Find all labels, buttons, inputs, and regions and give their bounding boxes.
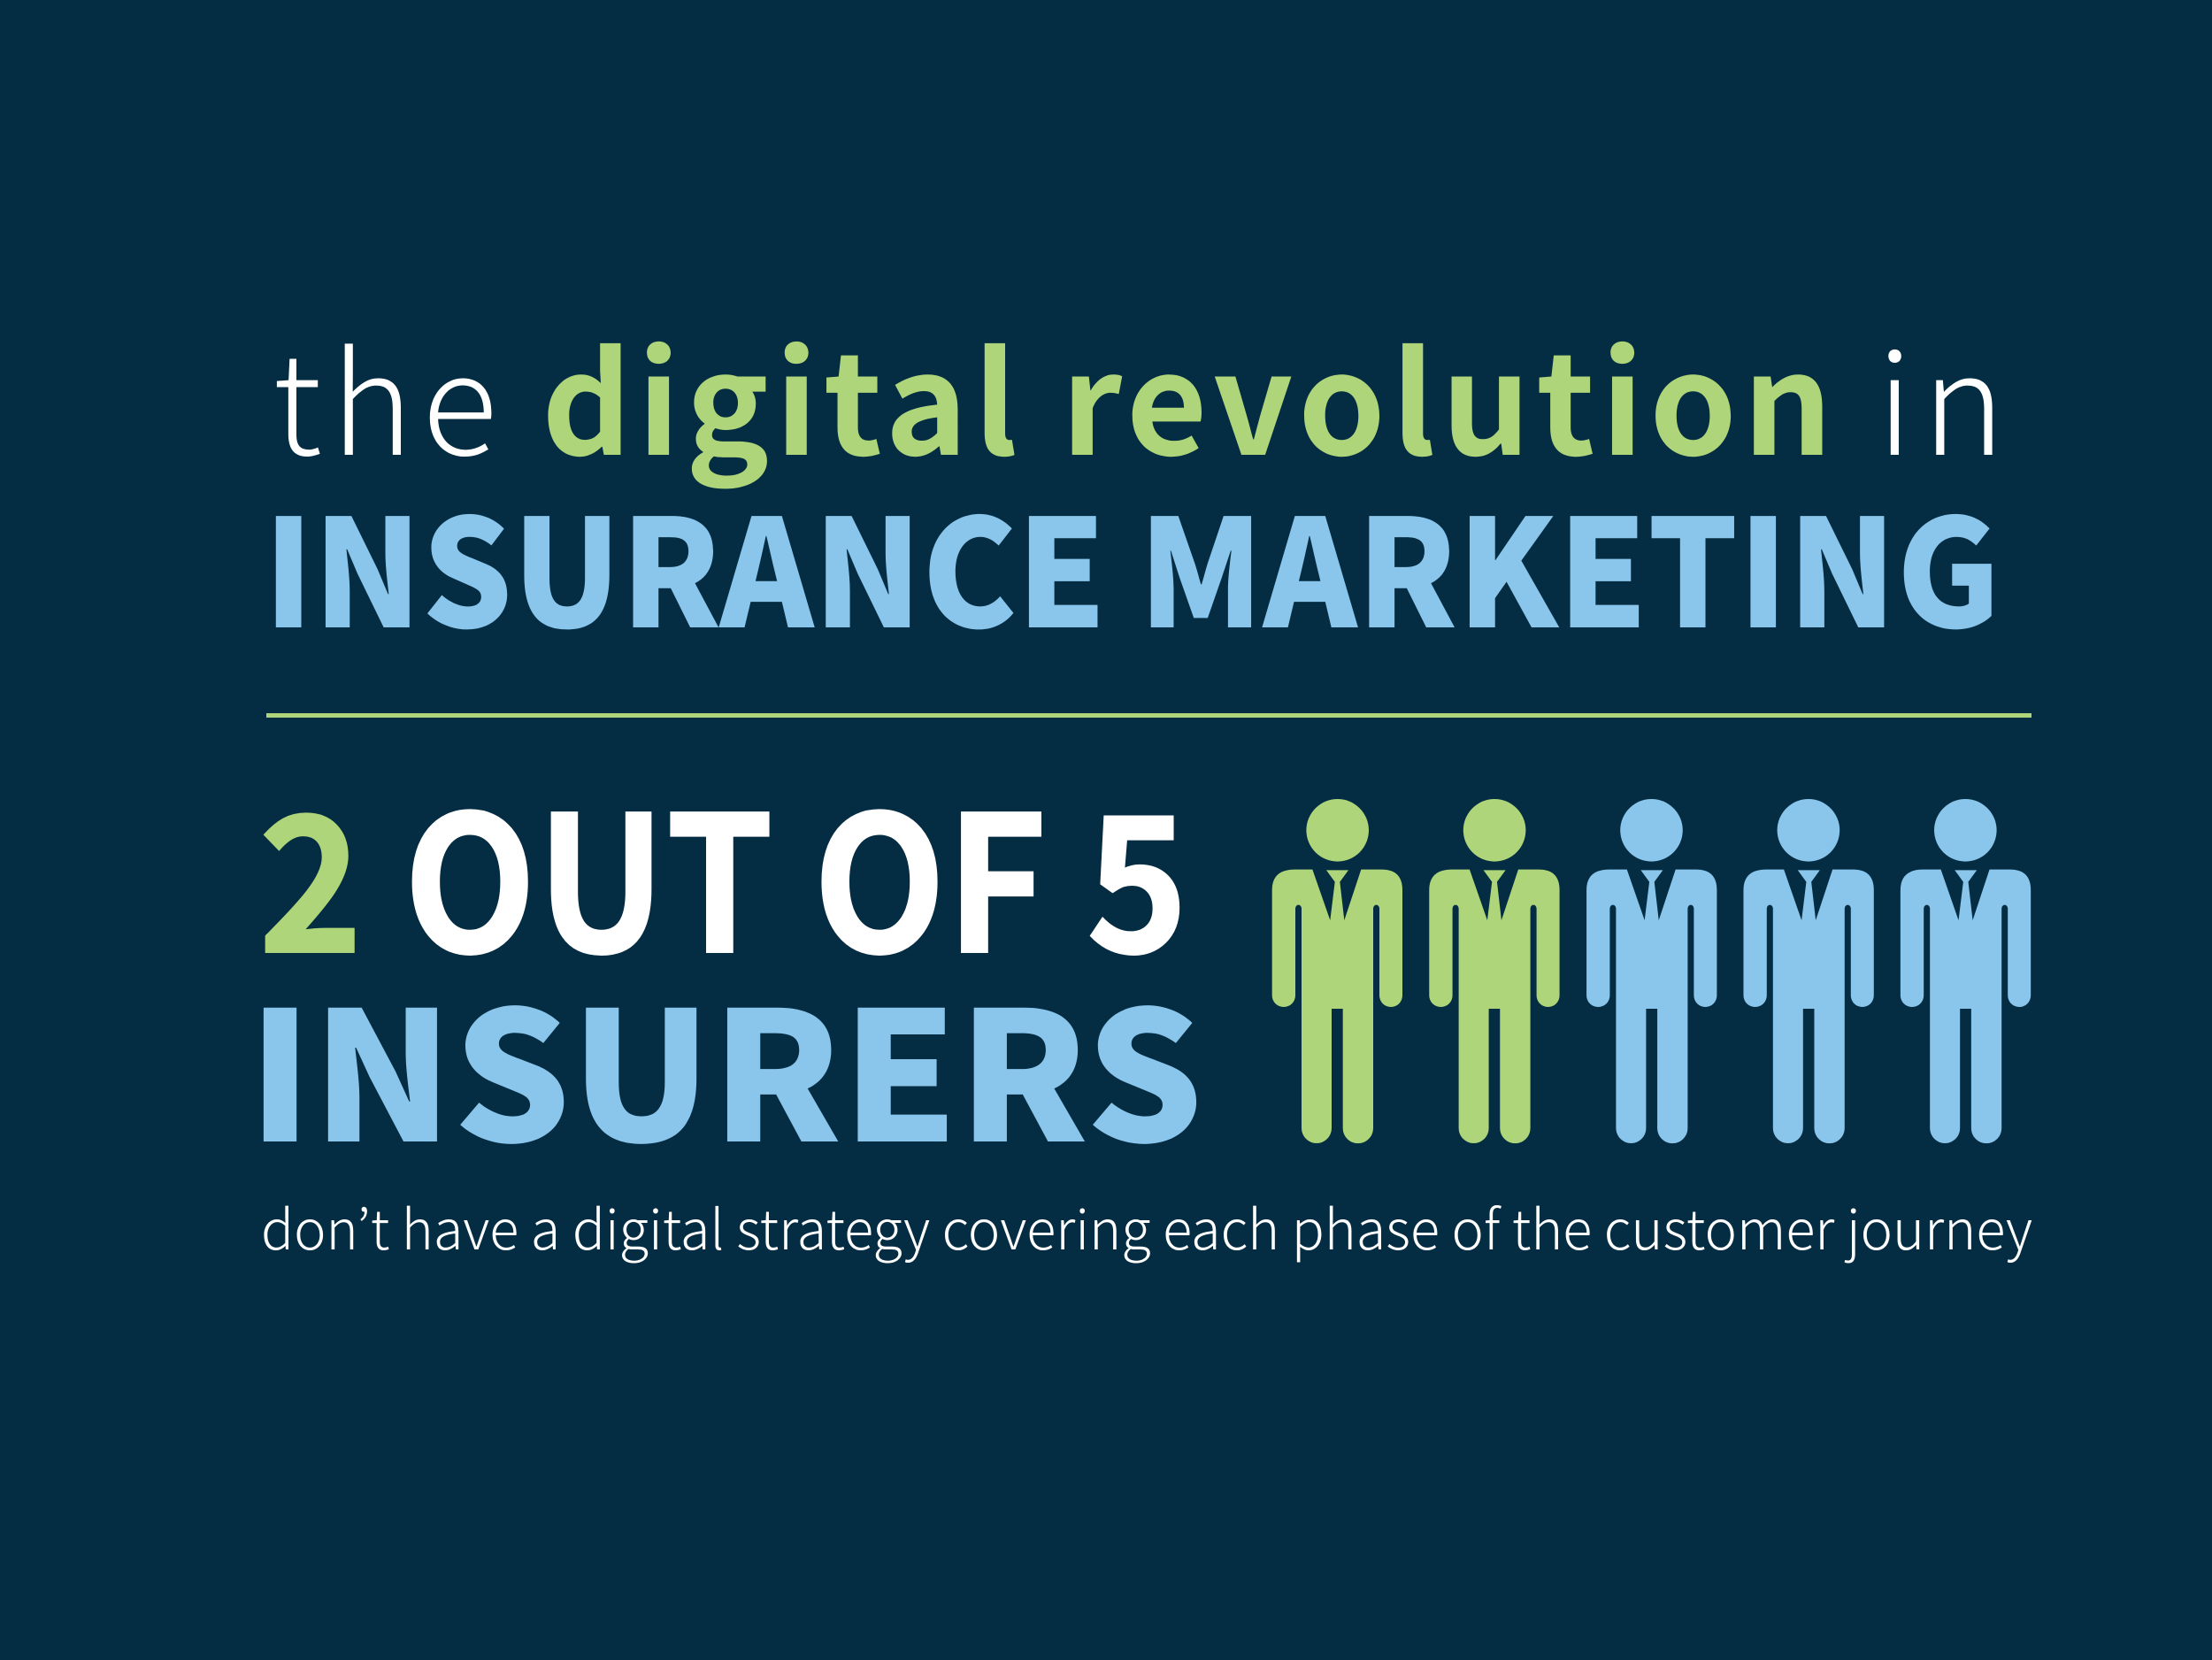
title line 1: the digital revolution in: digital revolution: [541, 293, 1832, 496]
title: [264, 293, 2005, 671]
statistic headline: [248, 734, 1203, 1194]
title line 1: the digital revolution in: the: [273, 293, 497, 496]
statistic: insurers: INSURERS: [248, 934, 1203, 1194]
icon: person 4 head: [1778, 799, 1839, 862]
title line 2: insurance marketing: INSURANCE MARKETING: [264, 454, 2001, 671]
subtitle text: don’t have a digital strategy covering each phase of the customer journey: [261, 1186, 2032, 1265]
icon: person 3 head: [1620, 799, 1683, 862]
icon: person 2 green: [1429, 870, 1560, 1143]
icon: person 1 head: [1306, 799, 1369, 862]
icon: person 5 blue: [1901, 870, 2031, 1143]
icon: person 2 head: [1463, 799, 1525, 862]
statistic: 2 out of 5: OUT OF 5: [403, 734, 1188, 1007]
icon: person 1 green: [1272, 870, 1402, 1143]
statistic: 2 out of 5: 2: [258, 734, 363, 1007]
icon: person 3 blue: [1586, 870, 1717, 1143]
pictogram: five business people: [1272, 799, 2031, 1143]
icon: person 4 blue: [1743, 870, 1874, 1143]
icon: person 5 head: [1934, 799, 1997, 862]
title line 1: the digital revolution in: in: [1877, 293, 2005, 496]
